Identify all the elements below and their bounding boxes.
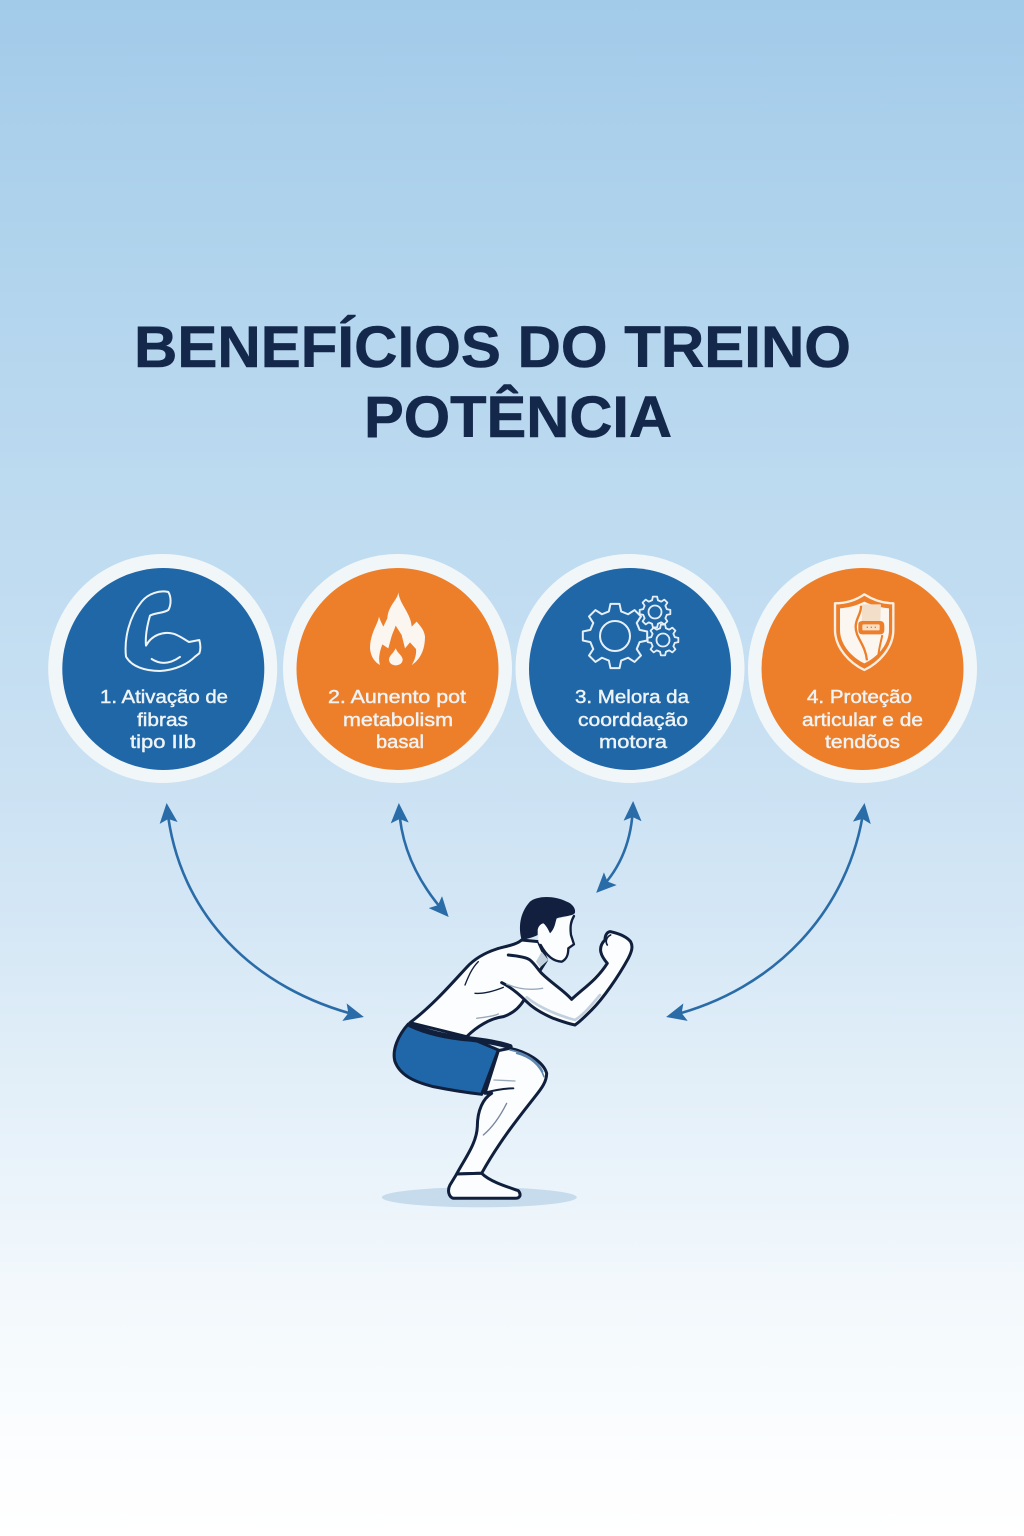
arrow: benefit 2 to athlete xyxy=(399,807,446,914)
label xyxy=(328,686,466,752)
panel: benefit 2 xyxy=(283,554,512,783)
title: BENEFÍCIOS DO TREINO xyxy=(134,315,851,380)
arm shade xyxy=(527,995,600,1020)
arrow: benefit 1 to athlete xyxy=(167,807,360,1016)
icon: gears xyxy=(583,597,678,668)
panel: benefit 3 xyxy=(516,554,744,783)
shorts stripes xyxy=(510,1050,544,1077)
label: 3. Melora da xyxy=(575,686,690,707)
leg xyxy=(457,1048,547,1174)
label: 2. Aunento pot xyxy=(328,686,466,707)
icon: knee shield xyxy=(835,594,893,670)
face profile xyxy=(541,916,574,962)
label: tendõos xyxy=(825,731,900,752)
hair xyxy=(520,897,575,940)
label xyxy=(802,686,923,752)
label: metabolism xyxy=(343,709,453,730)
label: coorddação xyxy=(578,709,688,730)
label: tipo IIb xyxy=(130,731,196,752)
panel: benefit 1 xyxy=(48,554,277,783)
arm xyxy=(500,932,632,1025)
title xyxy=(134,315,851,450)
icon: flexed arm xyxy=(126,591,200,671)
arrow: benefit 4 to athlete xyxy=(670,807,864,1016)
panel: benefit 4 xyxy=(748,554,977,783)
waistband xyxy=(410,1025,510,1047)
athlete figure xyxy=(394,897,632,1198)
label: fibras xyxy=(137,709,188,730)
muscle details xyxy=(465,935,611,1135)
face xyxy=(538,915,574,962)
arrow: benefit 3 to athlete xyxy=(599,805,633,890)
shorts xyxy=(394,1024,498,1094)
label xyxy=(575,686,690,752)
label: basal xyxy=(376,731,424,752)
ground shadow xyxy=(382,1187,577,1207)
label: 1. Ativação de xyxy=(100,686,228,707)
ear xyxy=(538,923,550,941)
label xyxy=(100,686,228,752)
label: articular e de xyxy=(802,709,923,730)
label: motora xyxy=(599,731,668,752)
title: POTÊNCIA xyxy=(364,385,672,450)
label: 4. Proteção xyxy=(807,686,912,707)
neck shade xyxy=(536,952,548,967)
foot xyxy=(449,1173,520,1198)
torso xyxy=(410,940,547,1037)
arm outline xyxy=(502,932,632,1025)
icon: flame xyxy=(370,592,425,665)
